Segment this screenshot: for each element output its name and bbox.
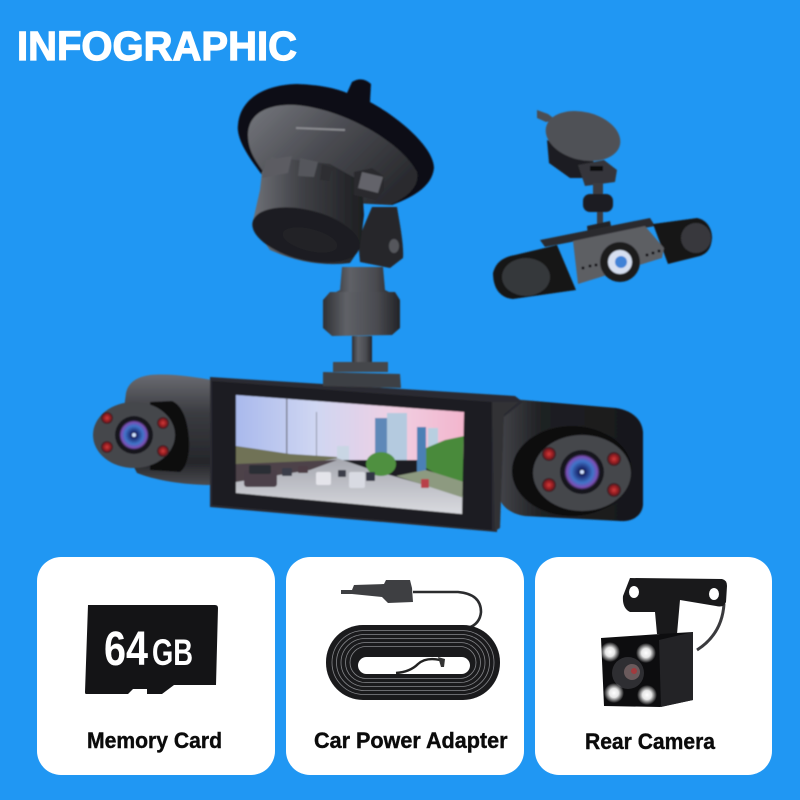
left lens plate bbox=[93, 402, 175, 468]
dash cam body bbox=[210, 377, 523, 532]
label: Car Power Adapter bbox=[314, 728, 508, 753]
icon: adapter and coiled cable bbox=[326, 580, 500, 700]
cars bbox=[244, 465, 429, 488]
left camera arm bbox=[93, 374, 212, 485]
title: INFOGRAPHIC bbox=[17, 23, 297, 69]
icon: microSD card: GB bbox=[152, 632, 193, 673]
label: Memory Card bbox=[87, 728, 222, 753]
suction mount bbox=[238, 79, 434, 372]
small suction cup bbox=[537, 104, 626, 236]
right camera arm bbox=[498, 398, 643, 521]
right lens plate bbox=[533, 435, 631, 511]
small camera body bbox=[493, 218, 712, 299]
main dash cam with suction mount bbox=[93, 79, 643, 532]
small dash cam rear view bbox=[493, 104, 712, 299]
screen showing road scene bbox=[236, 395, 464, 520]
icon: rear camera bbox=[600, 578, 727, 707]
icon: microSD card: 64 bbox=[104, 623, 148, 676]
label: Rear Camera bbox=[585, 729, 716, 754]
mount base bbox=[323, 372, 401, 388]
small front lens bbox=[600, 242, 640, 282]
card: car power adapter bbox=[286, 557, 524, 775]
card: memory card bbox=[37, 557, 275, 775]
card: rear camera bbox=[535, 557, 772, 775]
icon: microSD card bbox=[85, 605, 218, 694]
